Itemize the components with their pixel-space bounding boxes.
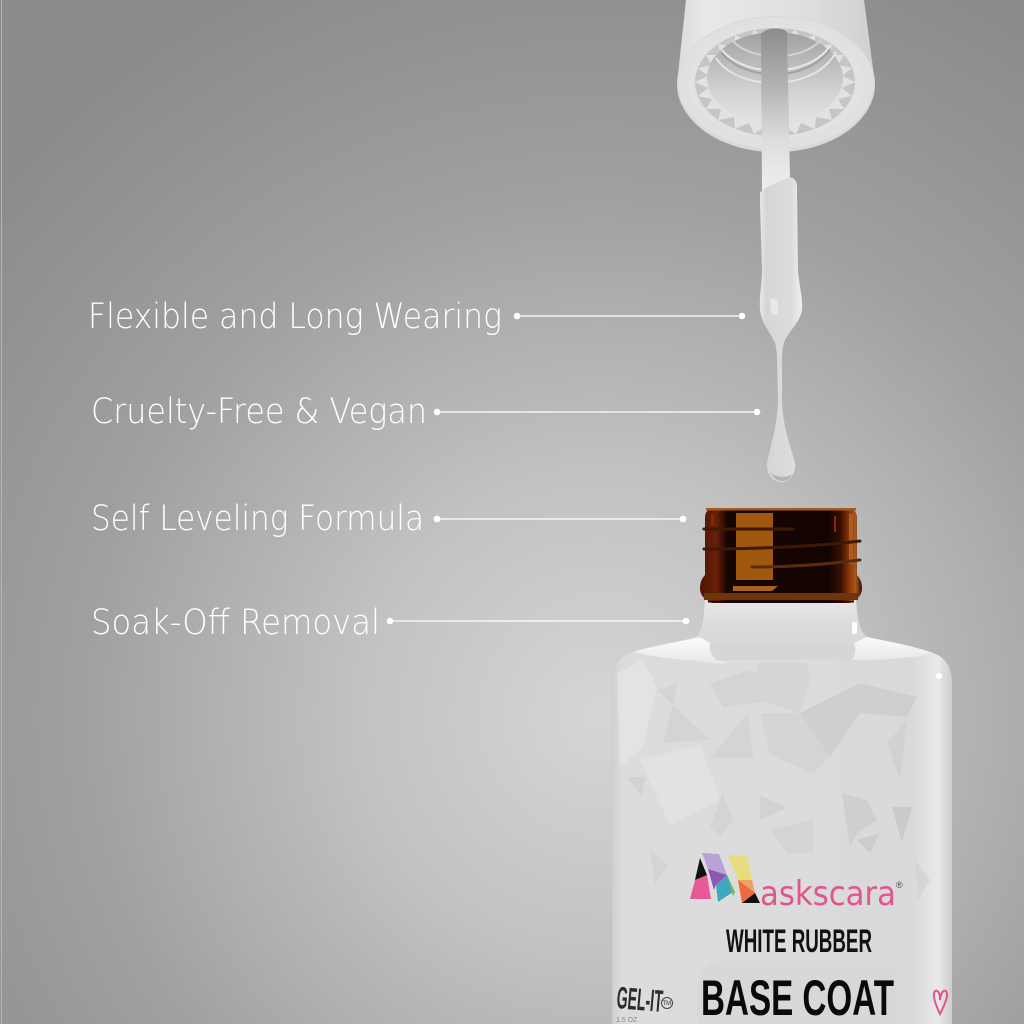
callout: cruelty-free and vegan [91,392,760,432]
dropper cap [677,0,875,152]
polish drip [760,177,802,482]
cap outer body [677,0,875,152]
bottle [612,508,952,1024]
size text: 1.5 OZ [616,1017,638,1024]
bottle body [612,600,952,1024]
product name: WHITE RUBBER [726,923,872,959]
callout: soak-off removal [91,603,689,643]
product label pill [697,961,900,1024]
trademark: TM [662,1001,671,1007]
registered mark: ® [896,880,903,890]
cap rim [677,16,875,152]
cap tooth band [695,28,855,136]
droplet shade [770,472,792,481]
geometric pattern [617,660,930,900]
shoulder highlight left [633,637,730,664]
cap interior [707,32,843,124]
amber reflection [736,513,773,580]
shoulder collar [710,644,855,660]
drip highlight [770,298,778,315]
brand logo [690,853,903,914]
callout: self leveling formula [91,499,686,539]
logo wordmark: askscara [760,874,896,914]
neck highlight [852,622,857,634]
callout: soak-off removal: Soak-Off Removal [91,603,380,643]
vegan heart icon [934,991,947,1014]
trademark [662,998,672,1008]
callout: self leveling formula: Self Leveling Formula [91,499,424,539]
logo mark [690,853,760,903]
bottle neck [697,600,867,645]
cap teeth [695,28,855,136]
cap opening [688,24,864,140]
callout: cruelty-free and vegan: Cruelty-Free & Vegan [91,392,427,432]
amber bottle neck threads [700,508,862,603]
brush stem [761,28,790,192]
shoulder highlight right [851,637,933,660]
bottle: GEL-IT [615,980,664,1019]
body glint [936,673,942,679]
callout: flexible and long wearing: Flexible and Long Wearing [88,297,502,337]
